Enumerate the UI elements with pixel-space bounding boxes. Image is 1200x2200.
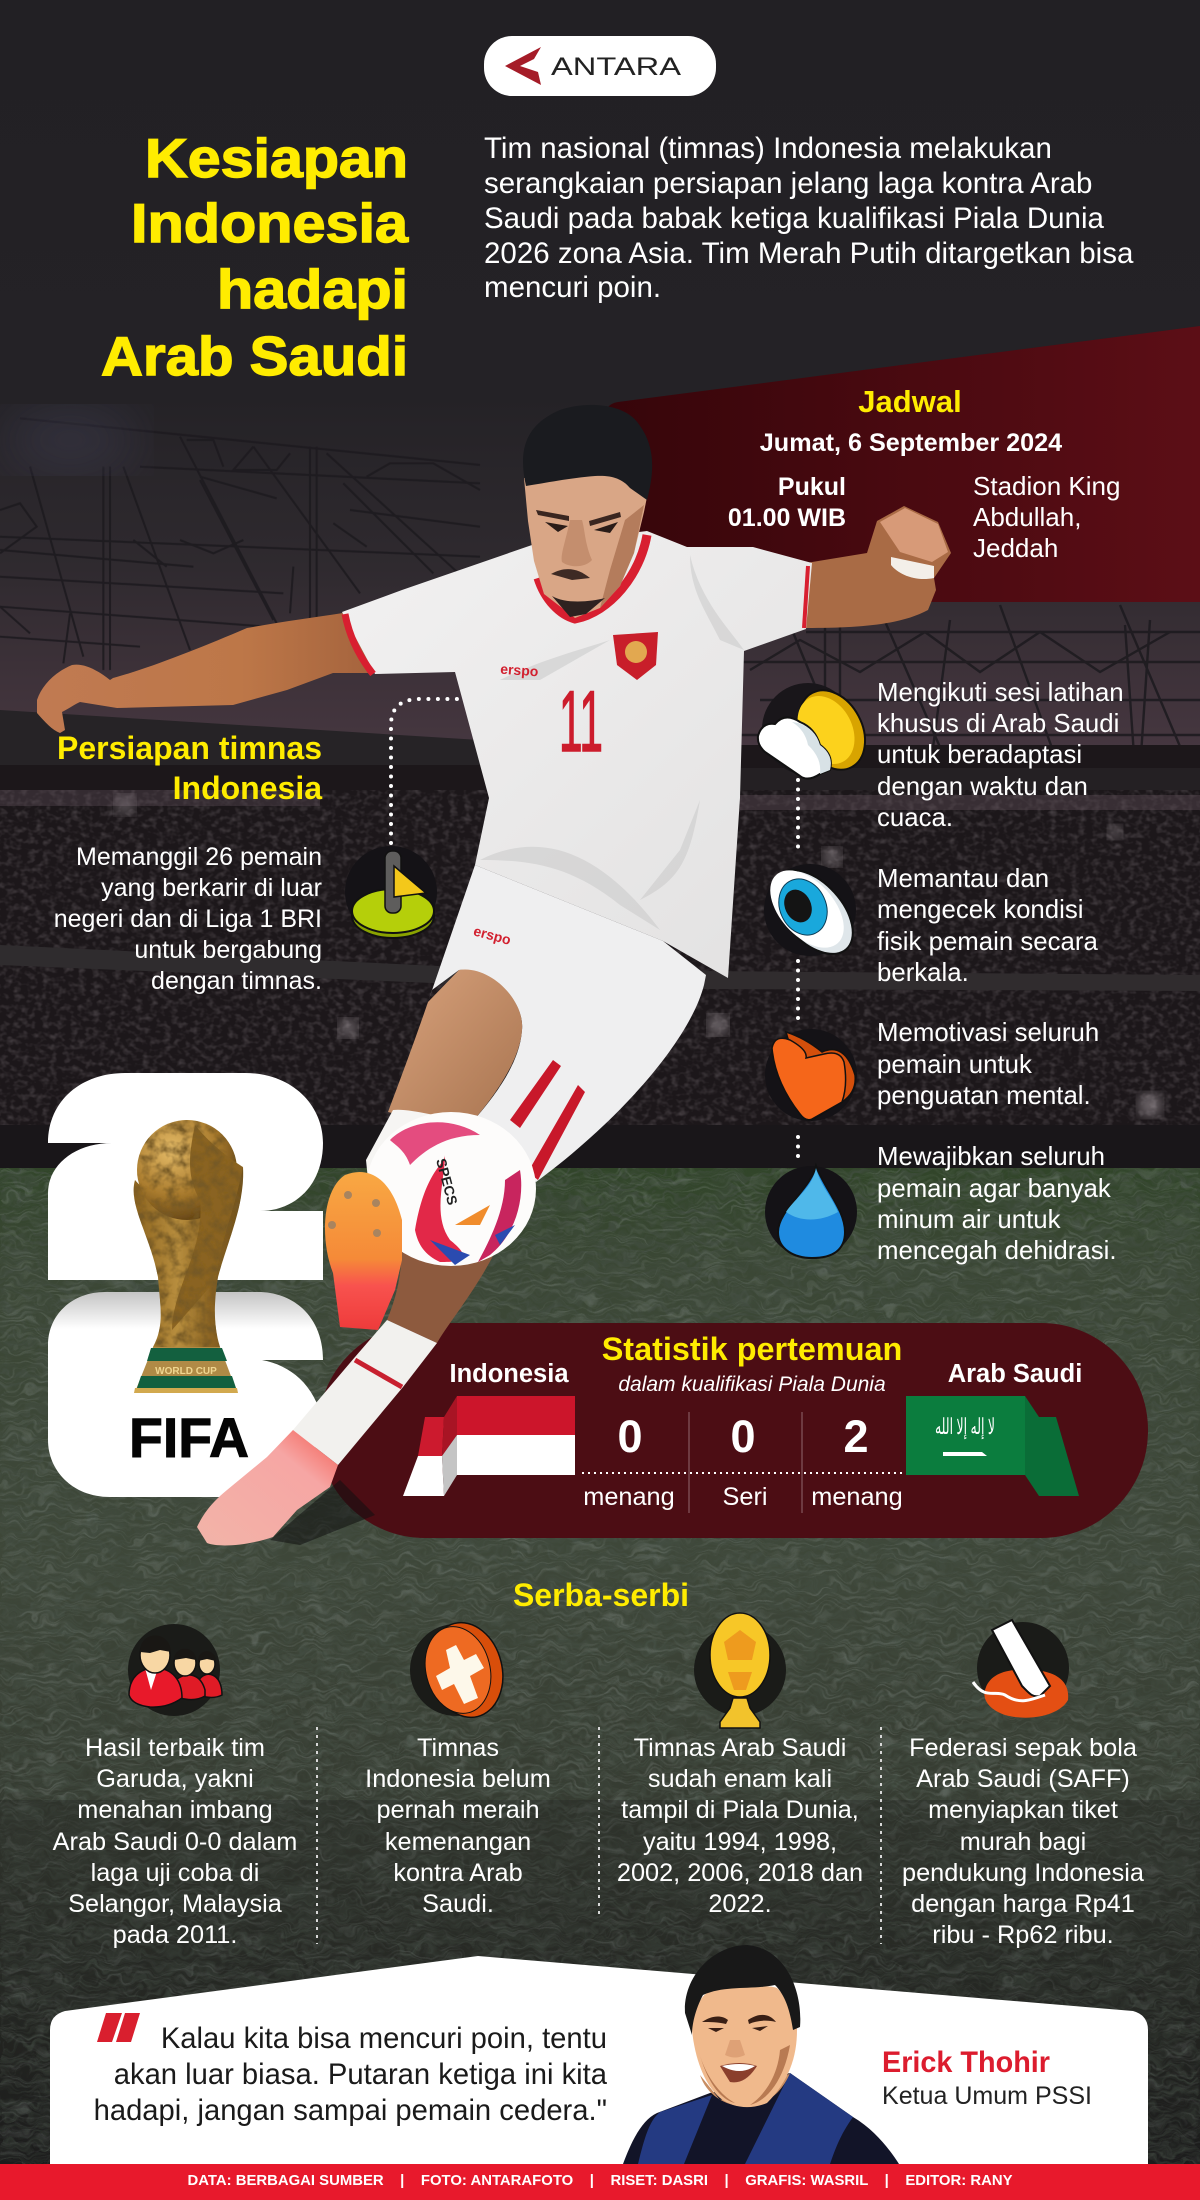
scores: 2: [843, 1411, 869, 1462]
text: hasil terbaik: menahan imbang: [77, 1796, 273, 1824]
eyes: [545, 522, 618, 533]
intro text: Saudi pada babak ketiga kualifikasi Piala Dunia: [484, 202, 1104, 235]
chin beard: [552, 596, 605, 617]
kick-off time: [728, 473, 846, 532]
panel: persiapan timnas left: [54, 730, 322, 995]
intro text: Tim nasional (timnas) Indonesia melakukan: [484, 132, 1052, 165]
heading: serba-serbi: Serba-serbi: [513, 1577, 689, 1613]
connector: left dotted line: [391, 699, 462, 843]
text: kondisi fisik: Memantau dan: [877, 865, 1049, 893]
text: sesi latihan: khusus di Arab Saudi: [877, 710, 1119, 738]
icon: red team players: [128, 1624, 222, 1716]
heading: statistik pertemuan: Statistik pertemuan: [602, 1331, 902, 1367]
sock stripe: [355, 1360, 402, 1387]
heading: jadwal: Jadwal: [858, 384, 962, 419]
footer credits bar: [0, 2164, 1200, 2200]
portrait smile: [720, 2063, 757, 2082]
text: minum air: [877, 1143, 1116, 1265]
trophy: [134, 1120, 243, 1393]
upper sock: [366, 1110, 480, 1200]
text: belum menang: Saudi.: [422, 1890, 494, 1918]
intro text: [484, 132, 1134, 304]
quote text: [94, 2023, 608, 2127]
shorts brand: erspo: [472, 923, 513, 948]
illustration: footballer: [37, 405, 951, 1545]
text: sesi latihan: untuk beradaptasi: [877, 741, 1082, 769]
text: memanggil 26 pemain: negeri dan di Liga 1 BRI: [54, 905, 322, 933]
right arm: [806, 506, 951, 628]
text: tiket murah: dengan harga Rp41: [911, 1890, 1135, 1918]
text: tiket murah: Federasi sepak bola: [909, 1734, 1138, 1762]
logo: ANTARA pill: [484, 36, 716, 96]
text: belum menang: pernah meraih: [376, 1796, 540, 1824]
scores: 0: [730, 1411, 756, 1462]
numeral 2: [48, 1073, 323, 1280]
text: enam kali piala dunia: tampil di Piala Dunia,: [621, 1796, 859, 1824]
text: kondisi fisik: mengecek kondisi: [877, 896, 1084, 924]
lower sock: [293, 1320, 437, 1465]
numeral 6: [48, 1292, 323, 1497]
flag: Saudi Arabia: لا إله إلا الله: [935, 1414, 995, 1440]
text: kondisi fisik: [877, 865, 1098, 987]
shorts number 11: [510, 1060, 585, 1180]
quote text: Kalau kita bisa mencuri poin, tentu: [161, 2023, 607, 2055]
background: dark sky and stadium back wall: [0, 0, 1200, 790]
neck and face: [524, 468, 647, 618]
text: tiket murah: pendukung Indonesia: [902, 1859, 1145, 1887]
text: enam kali piala dunia: [617, 1734, 863, 1918]
text: tiket murah: [902, 1734, 1145, 1949]
venue: Jeddah: [973, 533, 1058, 563]
jersey folds: [480, 555, 744, 930]
text: memanggil 26 pemain: dengan timnas.: [151, 967, 322, 995]
kick-off time: Pukul: [778, 473, 846, 501]
trophy base lettering: WORLD CUP: [155, 1366, 217, 1377]
quote text: akan luar biasa. Putaran ketiga ini kita: [114, 2059, 608, 2091]
thigh: [388, 970, 522, 1125]
FIFA wordmark: FIFA: [129, 1406, 249, 1469]
text: enam kali piala dunia: sudah enam kali: [648, 1765, 832, 1793]
text: belum menang: Timnas: [417, 1734, 499, 1762]
text: memanggil 26 pemain: untuk bergabung: [134, 936, 322, 964]
jersey sleeve trim and collar: [345, 535, 808, 674]
team name: Arab Saudi: Arab Saudi: [948, 1360, 1082, 1388]
face shading: [600, 505, 644, 608]
portrait nose: [725, 2040, 745, 2058]
text: tiket murah: menyiapkan tiket: [928, 1796, 1118, 1824]
background: grass pitch: [0, 1168, 1200, 2164]
text: sesi latihan: Mengikuti sesi latihan: [877, 679, 1124, 707]
fist highlight: [880, 508, 948, 562]
shin skin: [387, 1230, 505, 1343]
text: sesi latihan: [877, 679, 1124, 832]
text: enam kali piala dunia: Timnas Arab Saudi: [634, 1734, 846, 1762]
title: hadapi: [217, 258, 408, 320]
text: hasil terbaik: Selangor, Malaysia: [68, 1890, 283, 1918]
dividers: [317, 1727, 881, 1944]
jersey brand: erspo: [500, 661, 539, 679]
icon: ticket phone: [973, 1620, 1069, 1718]
text: belum menang: kontra Arab: [393, 1859, 523, 1887]
title: Indonesia: [131, 192, 408, 254]
speaker name: Erick Thohir: [882, 2046, 1050, 2079]
connector: right dotted line: [796, 780, 800, 1160]
portrait face: [692, 1986, 797, 2107]
text: minum air: mencegah dehidrasi.: [877, 1237, 1116, 1265]
footer credits bar: DATA: BERBAGAI SUMBER | FOTO: ANTARAFOTO | RISET: DASRI | GRAFIS: WASRIL | EDITOR: RANY: [188, 2172, 1012, 2189]
kick-off time: 01.00 WIB: [728, 504, 846, 532]
text: belum menang: [365, 1734, 551, 1918]
quote mark: [97, 2013, 140, 2042]
venue: Abdullah,: [973, 502, 1081, 532]
jersey: [342, 531, 812, 978]
text: belum menang: kemenangan: [385, 1828, 531, 1856]
icon: sun and cloud: [758, 679, 878, 781]
text: tiket murah: Arab Saudi (SAFF): [916, 1765, 1130, 1793]
text: enam kali piala dunia: yaitu 1994, 1998,: [643, 1828, 837, 1856]
ball: SPECS: [433, 1157, 461, 1207]
intro text: mencuri poin.: [484, 271, 661, 304]
text: hasil terbaik: [53, 1734, 297, 1949]
score labels: [583, 1483, 903, 1511]
moustache and mouth: [551, 569, 590, 580]
title: Kesiapan: [145, 127, 408, 189]
score labels: menang: [811, 1483, 903, 1511]
venue: Stadion King: [973, 471, 1120, 501]
illustration: footballer: 11: [559, 674, 603, 770]
panel: right preparation list: [877, 679, 1124, 1265]
flag: Saudi Arabia: [906, 1396, 1079, 1496]
wrist band: [891, 557, 934, 579]
text: kondisi fisik: berkala.: [877, 959, 969, 987]
match date: Jumat, 6 September 2024: [760, 429, 1062, 457]
scores: 0: [617, 1411, 643, 1462]
pink boot: [197, 1430, 338, 1545]
background: crowd stands: [0, 710, 1200, 1170]
text: enam kali piala dunia: 2022.: [708, 1890, 772, 1918]
brows: [536, 510, 621, 526]
text: minum air: pemain agar banyak: [877, 1175, 1111, 1203]
icon: golden ball trophy: [694, 1613, 786, 1728]
heading: persiapan timnas: Persiapan timnas: [57, 730, 322, 766]
text: sesi latihan: dengan waktu dan: [877, 773, 1088, 801]
text: sesi latihan: cuaca.: [877, 804, 953, 832]
venue: [973, 471, 1120, 563]
text: tiket murah: murah bagi: [960, 1828, 1086, 1856]
background: blue floodlight glow: [0, 410, 140, 470]
portrait: Erick Thohir: [623, 1945, 899, 2164]
score labels: menang: [583, 1483, 675, 1511]
text: hasil terbaik: Hasil terbaik tim: [85, 1734, 265, 1762]
text: penguatan mental: Memotivasi seluruh: [877, 1019, 1099, 1047]
text: hasil terbaik: Arab Saudi 0-0 dalam: [53, 1828, 297, 1856]
logo: ANTARA pill: ANTARA: [551, 53, 681, 81]
text: belum menang: Indonesia belum: [365, 1765, 551, 1793]
text: memanggil 26 pemain: yang berkarir di luar: [101, 874, 322, 902]
text: minum air: Mewajibkan seluruh: [877, 1143, 1105, 1171]
text: hasil terbaik: Garuda, yakni: [96, 1765, 254, 1793]
background: steel roof truss: [0, 418, 1200, 770]
text: penguatan mental: [877, 1019, 1099, 1110]
text: enam kali piala dunia: 2002, 2006, 2018 dan: [617, 1859, 863, 1887]
team name: Indonesia: Indonesia: [449, 1360, 569, 1388]
intro text: 2026 zona Asia. Tim Merah Putih ditargetkan bisa: [484, 237, 1134, 270]
panel: statistik pertemuan: [318, 1323, 1148, 1538]
icon: heart: [765, 1029, 857, 1121]
panel: quote: [50, 1945, 1148, 2164]
ball: [366, 1112, 536, 1266]
text: tiket murah: ribu - Rp62 ribu.: [932, 1921, 1114, 1949]
intro text: serangkaian persiapan jelang laga kontra Arab: [484, 167, 1092, 200]
icon: medical cross: [410, 1615, 513, 1725]
score labels: Seri: [722, 1483, 768, 1511]
scores: [617, 1411, 869, 1462]
subheading: dalam kualifikasi Piala Dunia: [618, 1373, 886, 1396]
text: kondisi fisik: fisik pemain secara: [877, 928, 1098, 956]
text: memanggil 26 pemain: [54, 843, 322, 995]
hair: [523, 405, 652, 500]
portrait hair: [685, 1945, 800, 2035]
text: memanggil 26 pemain: Memanggil 26 pemain: [76, 843, 322, 871]
text: penguatan mental: penguatan mental.: [877, 1082, 1091, 1110]
panel: jadwal: [606, 326, 1200, 602]
text: hasil terbaik: laga uji coba di: [91, 1859, 259, 1887]
heading: persiapan timnas: Indonesia: [173, 770, 322, 806]
nose: [562, 520, 592, 566]
quote text: hadapi, jangan sampai pemain cedera.": [94, 2095, 607, 2127]
left arm: [37, 613, 377, 733]
title: Arab Saudi: [101, 325, 408, 387]
icon: water drop: [765, 1166, 857, 1258]
icon: training flag cone: [345, 846, 437, 938]
boot shadow: [270, 1480, 375, 1545]
heading: persiapan timnas: [57, 730, 322, 806]
text: hasil terbaik: pada 2011.: [113, 1921, 237, 1949]
text: minum air: minum air untuk: [877, 1206, 1061, 1234]
orange boot: [325, 1172, 402, 1330]
speaker role: Ketua Umum PSSI: [882, 2082, 1092, 2110]
portrait brows and eyes: [702, 2015, 776, 2032]
portrait shading: [699, 2045, 790, 2105]
flag: Indonesia: [403, 1396, 575, 1496]
icon: eye: [756, 855, 868, 969]
title: [101, 127, 408, 387]
jersey crest: [613, 632, 658, 680]
shorts far and near: [428, 865, 706, 1182]
logo: 2026 FIFA World Cup: [48, 1073, 323, 1497]
text: penguatan mental: pemain untuk: [877, 1051, 1032, 1079]
